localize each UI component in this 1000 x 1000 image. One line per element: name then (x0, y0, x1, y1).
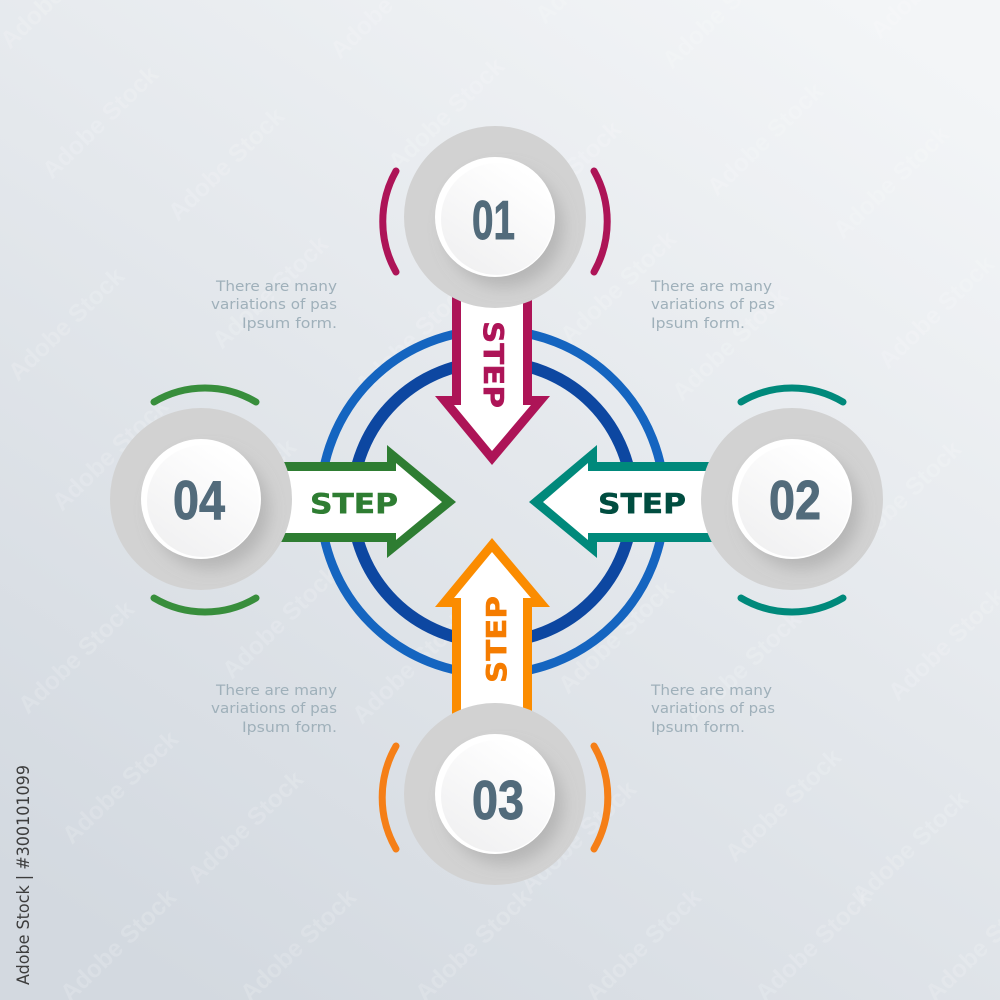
arrow 04: right, STEP: STEP (310, 487, 398, 520)
text block: bottom right: Ipsum form. (651, 720, 745, 736)
stock id caption: Adobe Stock | #300101099 (14, 765, 34, 985)
watermark pattern: Adobe Stock (500, 116, 627, 239)
watermark pattern: Adobe Stock (847, 786, 974, 909)
text block: top left: variations of pas (211, 297, 337, 313)
arrow 03: up, STEP (435, 538, 550, 715)
watermark pattern: Adobe Stock (350, 276, 477, 399)
watermark pattern: Adobe Stock (828, 121, 955, 244)
watermark pattern: Adobe Stock (667, 283, 794, 406)
text block: top left: There are many (215, 279, 337, 295)
text block: top right (650, 279, 775, 332)
text block: top right: Ipsum form. (651, 316, 745, 332)
watermark pattern: Adobe Stock (555, 226, 682, 349)
arcs 03 (382, 746, 608, 849)
text block: bottom right: There are many (650, 683, 772, 699)
watermark pattern: Adobe Stock (57, 726, 184, 849)
central double ring (320, 330, 664, 674)
arrow 02: left, STEP: STEP (598, 487, 686, 520)
text block: bottom left: There are many (215, 683, 337, 699)
arcs 02 (741, 388, 843, 612)
watermark pattern: Adobe Stock (840, 436, 967, 559)
text block: top right: variations of pas (651, 297, 775, 313)
watermark pattern: Adobe Stock (37, 61, 164, 184)
number 02: 02 (769, 469, 821, 531)
text block: bottom left (211, 683, 337, 736)
watermark pattern: Adobe Stock (175, 434, 302, 557)
watermark pattern: Adobe Stock (47, 393, 174, 516)
step 02 badge (701, 388, 883, 612)
watermark pattern: Adobe Stock (702, 78, 829, 201)
watermark pattern: Adobe Stock (515, 776, 642, 899)
text block: bottom right: variations of pas (651, 701, 775, 717)
arrow 03: up, STEP: STEP (480, 596, 513, 683)
number 04: 04 (173, 469, 225, 531)
number 03: 03 (472, 769, 524, 831)
watermark pattern: Adobe Stock (207, 231, 334, 354)
watermark pattern: Adobe Stock (553, 576, 680, 699)
text block: bottom right (650, 683, 775, 736)
arcs 01 (383, 171, 607, 272)
text block: top right: There are many (650, 279, 772, 295)
step 01 badge (383, 126, 607, 308)
arrow 01: down, STEP: STEP (477, 321, 510, 408)
text block: bottom left: Ipsum form. (242, 720, 337, 736)
arrow 02: left, STEP (529, 445, 715, 558)
number 01: 01 (472, 189, 515, 251)
step 03 badge (382, 703, 608, 885)
watermark pattern: Adobe Stock (217, 561, 344, 684)
watermark pattern: Adobe Stock (720, 744, 847, 867)
step 04 badge (110, 388, 292, 612)
text block: top left (211, 279, 337, 332)
arrow 04: right, STEP (278, 445, 456, 558)
text block: top left: Ipsum form. (242, 316, 337, 332)
watermark pattern: Adobe Stock (873, 251, 1000, 374)
watermark pattern: Adobe Stock (347, 606, 474, 729)
text block: bottom left: variations of pas (211, 701, 337, 717)
watermark pattern: Adobe Stock (13, 596, 140, 719)
watermark pattern: Adobe Stock (163, 103, 290, 226)
arrow 01: down, STEP (435, 295, 550, 465)
watermark pattern: Adobe Stock (680, 606, 807, 729)
watermark pattern: Adobe Stock (3, 263, 130, 386)
watermark pattern: Adobe Stock (182, 766, 309, 889)
watermark pattern: Adobe Stock (383, 53, 510, 176)
arcs 04 (154, 388, 256, 612)
